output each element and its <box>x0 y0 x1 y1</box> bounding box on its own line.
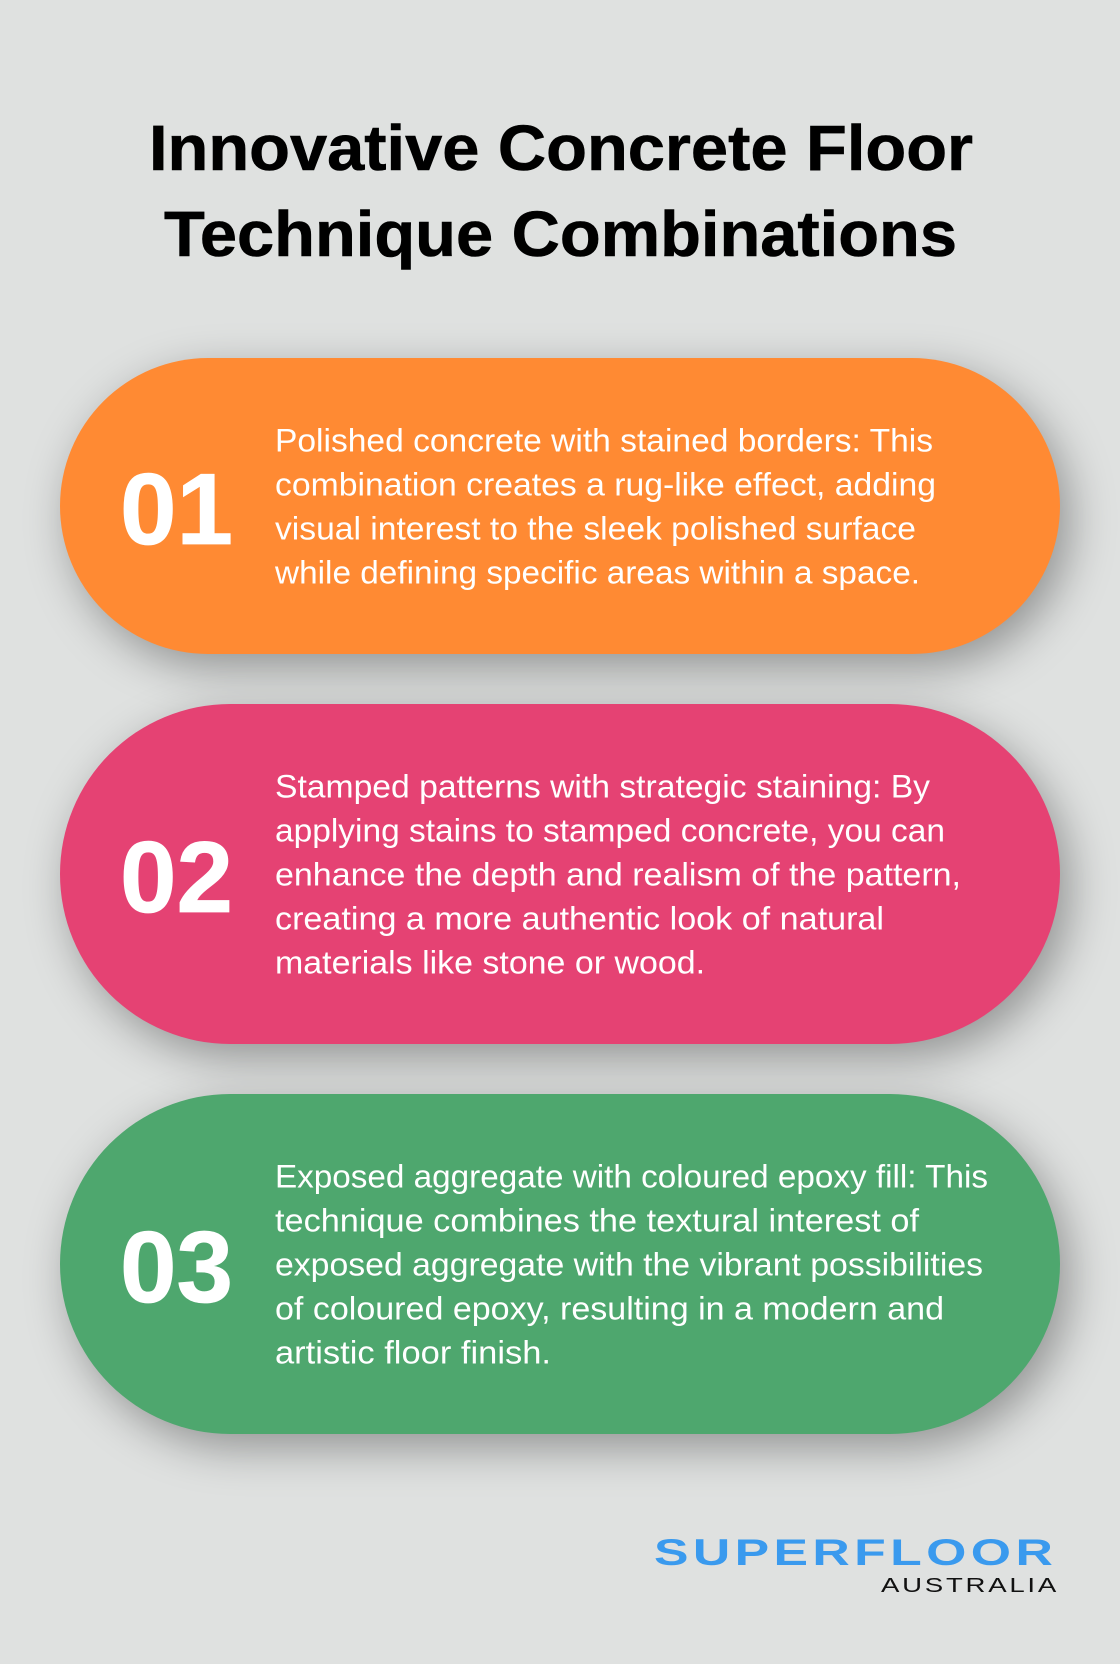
text block: step 03 description <box>275 1158 988 1370</box>
text block: step 01 description: combination creates a rug-like effect, adding <box>275 466 936 502</box>
logo: Superfloor Australia <box>654 1531 1057 1597</box>
text block: step 03 description: exposed aggregate with the vibrant possibilities <box>275 1246 983 1282</box>
orange pill background <box>60 358 1060 654</box>
text block: step 02 description: materials like stone or wood. <box>275 944 705 980</box>
logo: Superfloor Australia: SUPERFLOOR <box>654 1531 1053 1573</box>
green pill background <box>60 1094 1060 1434</box>
panel: step 01 polished concrete <box>60 358 1060 654</box>
text block: step 01 description: visual interest to the sleek polished surface <box>275 510 916 546</box>
panel: step 02 stamped patterns <box>60 704 1060 1044</box>
text block: step 03 description: Exposed aggregate with coloured epoxy fill: This <box>275 1158 988 1194</box>
title: Technique Combinations <box>164 198 957 270</box>
number 01: 01 <box>120 454 233 566</box>
pink pill background <box>60 704 1060 1044</box>
text block: step 01 description <box>274 422 936 590</box>
panel: step 03 exposed aggregate <box>60 1094 1060 1434</box>
number 03: 03 <box>120 1212 233 1324</box>
logo: Superfloor Australia: AUSTRALIA <box>881 1575 1057 1597</box>
text block: step 03 description: artistic floor finish. <box>275 1334 551 1370</box>
text block: step 02 description: creating a more authentic look of natural <box>275 900 884 936</box>
text block: step 02 description: Stamped patterns with strategic staining: By <box>275 768 930 804</box>
text block: step 01 description: while defining specific areas within a space. <box>274 554 920 590</box>
number 02: 02 <box>120 822 233 934</box>
text block: step 02 description: applying stains to stamped concrete, you can <box>275 812 945 848</box>
text block: step 03 description: of coloured epoxy, resulting in a modern and <box>275 1290 944 1326</box>
text block: step 01 description: Polished concrete with stained borders: This <box>275 422 933 458</box>
text block: step 02 description: enhance the depth and realism of the pattern, <box>275 856 961 892</box>
text block: step 02 description <box>275 768 961 980</box>
title <box>149 112 973 270</box>
text block: step 03 description: technique combines the textural interest of <box>275 1202 919 1238</box>
title: Innovative Concrete Floor <box>149 112 973 184</box>
